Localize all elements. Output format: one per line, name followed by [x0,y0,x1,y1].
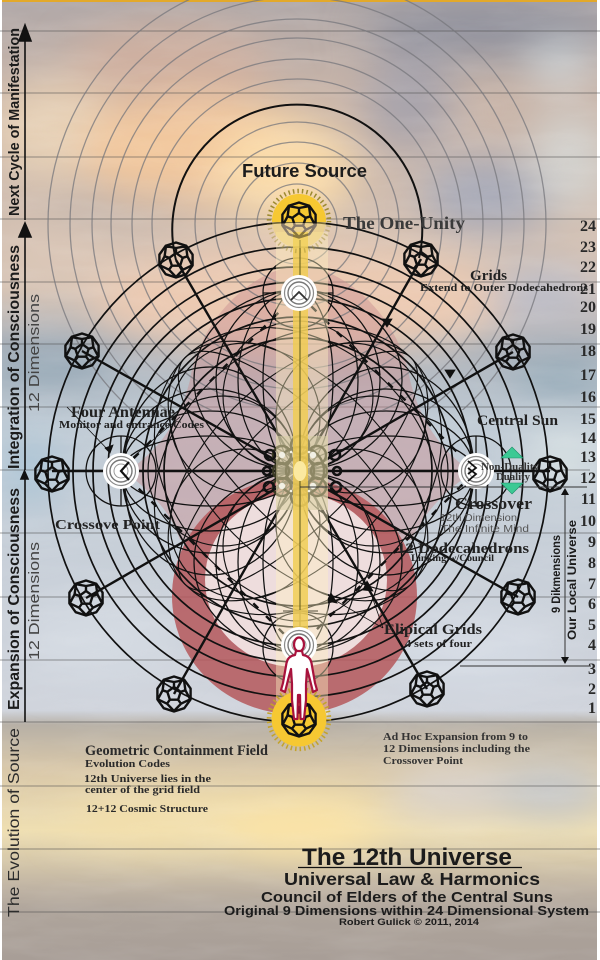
dimension numbers 24 to 1: 19 [580,321,596,338]
dimension numbers 24 to 1: 5 [588,617,596,634]
dodecahedron: far right [533,456,567,492]
concentric black rings of the grid field [48,222,548,722]
dimension numbers 24 to 1: 16 [580,389,596,406]
label: four antennae: Four Antennae [71,404,175,421]
subtitle: original 9 dimensions: Original 9 Dimensions within 24 Dimensional System [224,904,589,918]
label: four antennae: Monitor and entrance Codes [59,420,204,431]
text block: geometric containment field: Evolution Codes [85,758,171,770]
dimension numbers 24 to 1: 22 [580,259,596,276]
dodecahedron: upper right [404,242,438,276]
label: crossover [440,494,532,535]
text block: ad hoc expansion [383,731,530,767]
vertical label: expansion of consciousness: Expansion of Consciousness [6,488,23,710]
six spokes connecting the dodecahedrons [52,259,550,694]
dimension numbers 24 to 1: 23 [580,239,596,256]
arrow: expansion of consciousness [21,471,28,722]
label: crossover: The Infinite Mind [441,523,529,535]
local universe range arrow [300,487,591,666]
label: 12 dodecahedrons: Linking w/Council [411,554,494,564]
dodecahedron: left lower [69,580,103,616]
pale column [276,232,328,716]
text block: ad hoc expansion: Crossover Point [383,755,463,767]
gray concentric circles of future source [47,0,547,410]
label: elliptical grids [384,622,482,650]
text block: geometric containment field [84,743,268,815]
vertical label: 9 dimensions: 9 Dikmensions [551,535,563,613]
dimension numbers 24 to 1: 10 [580,513,596,530]
right crossover node [458,453,494,489]
central sun core with white nodes [279,451,316,492]
label: elliptical grids: Elipical Grids [384,622,482,638]
dodecahedron: upper left [159,242,193,278]
top sun: the one-unity [269,191,329,251]
vertical label: next cycle of manifestation: Next Cycle of Manifestation [6,28,23,216]
label: grids: Grids [470,268,507,284]
text block: geometric containment field: 12th Universe lies in the [84,773,211,785]
text block: geometric containment field: center of the grid field [85,784,200,796]
label: crossover point: Crossove Point [55,518,160,533]
bottom sun: evolution source [269,689,329,749]
human figure [281,638,317,719]
dimension numbers 24 to 1: 12 [580,470,596,487]
dimension numbers 24 to 1: 6 [588,596,596,613]
dodecahedron: lower left [157,676,191,712]
text block: geometric containment field: 12+12 Cosmic Structure [86,803,208,815]
dimension numbers 24 to 1: 3 [588,661,596,678]
dimension numbers 24 to 1: 4 [588,637,596,654]
title: The 12th Universe [302,844,512,871]
vertical label: our local universe: Our Local Universe [565,520,579,640]
label: four antennae [59,404,204,431]
dimension numbers 24 to 1: 2 [588,681,596,698]
left crossover node [103,453,139,489]
label: future source: Future Source [242,161,367,181]
dimension numbers 24 to 1: 17 [580,367,596,384]
label: central sun: Central Sun [477,413,558,429]
dimension numbers 24 to 1: 7 [588,576,596,593]
upper crossover node [281,275,317,311]
green triangles: duality markers [501,447,523,494]
red containment ring [172,478,417,714]
pink tint field [126,265,472,540]
text block: ad hoc expansion: Ad Hoc Expansion from 9 to [383,731,529,743]
elliptical grids: four sets of four [86,258,511,683]
dimension numbers 24 to 1: 1 [588,700,596,717]
dimension numbers 24 to 1: 21 [580,281,596,298]
dodecahedron: far left [35,456,69,492]
subtitle: universal law and harmonics: Universal Law & Harmonics [284,869,540,889]
small grid arrowheads and pointer lines [67,319,455,628]
text block: geometric containment field: Geometric Containment Field [85,743,268,759]
label: the one-unity: The One-Unity [343,213,465,233]
dimension numbers 24 to 1 [580,218,596,717]
label: non-duality and duality: Non-Duality [481,461,539,473]
label: grids: Extend to Outer Dodecahedrons [420,282,589,294]
dimension numbers 24 to 1: 24 [580,218,596,235]
label: elliptical grids: 4 sets of four [405,639,472,650]
label: 12 dodecahedrons: 12 Dodecahedrons [397,541,529,557]
vertical label: the evolution of source: The Evolution of Source [6,728,23,917]
subtitle: council of elders: Council of Elders of the Central Suns [261,889,553,906]
title block [224,844,589,927]
credit: Robert Gulick © 2011, 2014 [339,917,479,927]
central hub pattern [263,436,341,510]
dimension numbers 24 to 1: 11 [581,491,596,508]
text block: ad hoc expansion: 12 Dimensions including the [383,743,530,755]
dimension numbers 24 to 1: 13 [580,449,596,466]
thin axis line [299,240,301,610]
label: non-duality and duality: Duality [496,471,530,483]
label: 12 dodecahedrons [397,541,529,564]
dimension numbers 24 to 1: 20 [580,299,596,316]
vertical label: upper 12 dimensions: 12 Dimensions [26,294,43,412]
label: crossover: Crossover [455,494,532,513]
lower crossover node [281,627,317,663]
dodecahedron: left upper [65,334,99,368]
dimension numbers 24 to 1: 8 [588,555,596,572]
dimension numbers 24 to 1: 15 [580,411,596,428]
dimension numbers 24 to 1: 9 [588,534,596,551]
rosette of crossing circles around the hub [96,269,500,673]
arrow: integration of consciousness [19,223,31,470]
vertical label: lower 12 dimensions: 12 Dimensions [26,542,43,660]
dodecahedron: right lower [501,580,535,614]
yellow central axis [293,232,308,630]
title underline [298,866,522,868]
label: crossover: 12th Dimension [440,512,517,524]
label: non-duality and duality [481,461,539,483]
dashed crossover diamond [121,293,476,648]
vertical label: integration of consciousness: Integration of Consciousness [6,245,23,469]
dimension numbers 24 to 1: 18 [580,343,596,360]
label: grids [420,268,589,294]
dodecahedron: lower right [410,672,444,706]
dimension numbers 24 to 1: 14 [580,430,596,447]
dodecahedron: right upper [496,334,530,370]
black circle of future source [172,105,422,260]
arrow: next cycle of manifestation [19,25,31,220]
